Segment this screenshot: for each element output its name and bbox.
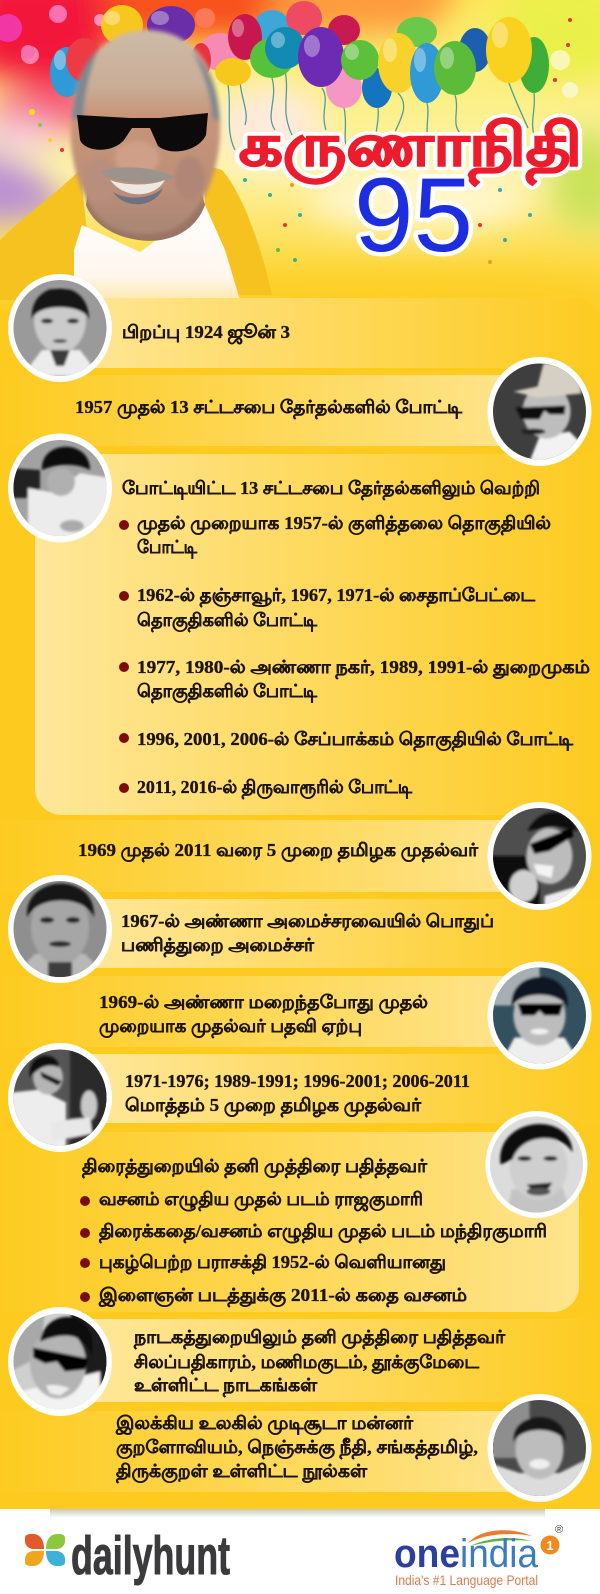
panel: birth xyxy=(50,298,600,368)
panel: cinema: புகழ்பெற்ற பராசக்தி 1952-ல் வெளியானது xyxy=(99,1252,446,1275)
panel: literature xyxy=(0,1411,520,1492)
portrait 2: hat and sunglasses xyxy=(488,357,592,466)
logo: dailyhunt: dailyhunt xyxy=(71,1526,230,1586)
logo: oneindia: ® xyxy=(555,1524,563,1536)
panel: contested from 1957: 1957 முதல் 13 சட்டசபை தேர்தல்களில் போட்டி xyxy=(75,397,463,420)
panel: cinema: வசனம் எழுதிய முதல் படம் ராஜகுமாரி xyxy=(99,1189,423,1212)
logo: oneindia: one xyxy=(394,1532,460,1576)
portrait 7: at microphone xyxy=(8,1043,112,1152)
portrait 5: young man xyxy=(8,875,112,983)
portrait 9: sunglasses, close-up xyxy=(8,1307,112,1416)
panel: five-time chief minister: 1969 முதல் 2011 வரை 5 முறை தமிழக முதல்வர் xyxy=(78,840,479,863)
panel: theatre: சிலப்பதிகாரம், மணிமகுடம், தூக்குமேடை xyxy=(134,1352,480,1375)
panel: contested from 1957 xyxy=(0,375,520,446)
title: 95: 95 xyxy=(354,157,473,274)
panel: cinema: இளைஞன் படத்துக்கு 2011-ல் கதை வசனம் xyxy=(98,1285,467,1308)
panel: five-time chief minister xyxy=(0,820,520,892)
panel: 13 wins: 1962-ல் தஞ்சாவூர், 1967, 1971-ல் சைதாப்பேட்டை xyxy=(137,585,536,608)
logo: oneindia xyxy=(394,1524,563,1588)
panel: theatre: நாடகத்துறையிலும் தனி முத்திரை பதித்தவர் xyxy=(133,1327,506,1350)
panel: 13 wins: போட்டியிட்ட 13 சட்டசபை தேர்தல்களிலும் வெற்றி xyxy=(122,478,540,501)
panel: theatre xyxy=(90,1319,600,1402)
portrait 8: smiling xyxy=(486,1111,588,1218)
portrait 4: laughing xyxy=(488,802,592,910)
balloons xyxy=(50,1,549,150)
confetti xyxy=(29,18,572,264)
logo: oneindia: India's #1 Language Portal xyxy=(395,1572,538,1588)
panel: 1967 minister: 1967-ல் அண்ணா அமைச்சரவையில் பொதுப் xyxy=(121,911,494,933)
panel: literature: திருக்குறள் உள்ளிட்ட நூல்கள் xyxy=(116,1461,368,1484)
panel: cinema xyxy=(0,1132,579,1312)
title: Karunanidhi: கருணாநிதி xyxy=(239,113,582,187)
footer xyxy=(0,1509,600,1594)
panel: cinema: திரைக்கதை/வசனம் எழுதிய முதல் படம் மந்திரகுமாரி xyxy=(99,1221,547,1244)
panel: theatre: உள்ளிட்ட நாடகங்கள் xyxy=(134,1375,318,1398)
panel: 13 wins: 1996, 2001, 2006-ல் சேப்பாக்கம் தொகுதியில் போட்டி xyxy=(137,729,574,752)
panel: 13 wins: 2011, 2016-ல் திருவாரூரில் போட்டி xyxy=(137,777,413,800)
panel: 13 wins: தொகுதிகளில் போட்டி xyxy=(137,681,318,704)
logo: oneindia: india xyxy=(460,1532,539,1576)
panel: 1967 minister: பணித்துறை அமைச்சர் xyxy=(121,935,315,958)
header banner xyxy=(0,0,600,325)
title: Karunanidhi: கருணாநிதி xyxy=(239,113,582,187)
panel: terms: 1971-1976; 1989-1991; 1996-2001; 2006-2011 xyxy=(125,1071,470,1091)
panel: 1967 minister xyxy=(90,899,600,968)
portrait 3: reading xyxy=(8,434,112,542)
panel: terms: மொத்தம் 5 முறை தமிழக முதல்வர் xyxy=(125,1095,422,1118)
main portrait xyxy=(0,30,272,300)
panel: 13 wins: போட்டி xyxy=(137,537,198,558)
panel: literature: இலக்கிய உலகில் முடிசூடா மன்னர் xyxy=(115,1413,414,1436)
portrait 6: sunglasses, dark background xyxy=(488,962,592,1070)
panel: 1969 chief minister: முறையாக முதல்வர் பதவி ஏற்பு xyxy=(99,1016,362,1039)
panel: 13 wins xyxy=(35,454,600,815)
logo: oneindia: 1 xyxy=(546,1538,554,1553)
panel: 13 wins: முதல் முறையாக 1957-ல் குளித்தலை தொகுதியில் xyxy=(137,513,551,536)
panel: cinema: திரைத்துறையில் தனி முத்திரை பதித்தவர் xyxy=(82,1156,428,1179)
panel: 1969 chief minister xyxy=(0,976,520,1047)
logo: dailyhunt xyxy=(25,1526,230,1586)
portrait 1: boy xyxy=(8,274,112,382)
panel: terms xyxy=(90,1054,600,1123)
panel: 13 wins: தொகுதிகளில் போட்டி xyxy=(137,610,318,633)
panel: literature: குறளோவியம், நெஞ்சுக்கு நீதி, சங்கத்தமிழ், xyxy=(116,1437,478,1460)
panel: 13 wins: 1977, 1980-ல் அண்ணா நகர், 1989, 1991-ல் துறைமுகம் xyxy=(137,657,590,680)
panel: 1969 chief minister: 1969-ல் அண்ணா மறைந்தபோது முதல் xyxy=(99,992,428,1015)
portrait 10: young smiling xyxy=(488,1394,592,1502)
panel: birth: பிறப்பு 1924 ஜூன் 3 xyxy=(122,322,290,345)
